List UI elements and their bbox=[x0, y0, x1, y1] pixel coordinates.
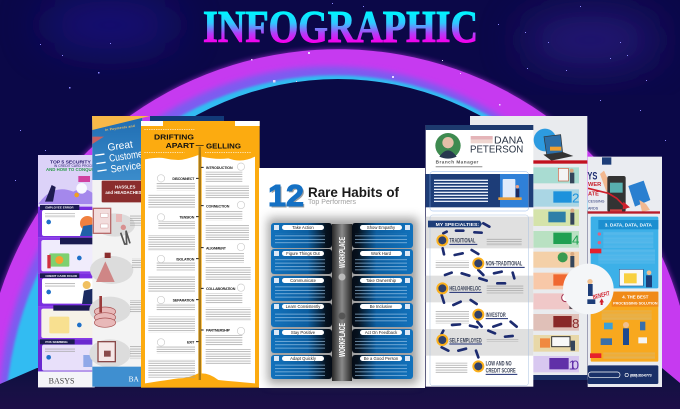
specialty labels: INVESTOR bbox=[486, 312, 506, 319]
benefit circle bbox=[563, 264, 614, 314]
left column: drifting stages: TENSION bbox=[179, 215, 195, 219]
specialty labels: NON-TRADITIONAL bbox=[486, 261, 522, 268]
heading: 12 rare habits: 12 bbox=[270, 180, 306, 214]
specialty labels: LOW AND NO bbox=[486, 361, 512, 368]
left column: drifting stages: ISOLATION bbox=[176, 257, 195, 261]
section: best processing solution: PROCESSING SOLUTION bbox=[613, 302, 658, 306]
panel: payment processing infographic bbox=[563, 157, 662, 387]
title: INFOGRAPHIC bbox=[203, 2, 478, 52]
red divider bbox=[588, 211, 660, 214]
laptop and globe icon bbox=[534, 129, 573, 161]
heading: drifting apart: DRIFTING bbox=[154, 133, 194, 142]
right column: gelling stages: ALIGNMENT bbox=[206, 246, 227, 250]
specialty labels bbox=[449, 238, 525, 374]
job title bbox=[436, 159, 482, 167]
right habit cards bbox=[352, 223, 413, 379]
contact footer: (888) 310-0773 bbox=[630, 373, 652, 378]
panel 1 headline bbox=[46, 159, 111, 172]
section: employee error bbox=[38, 205, 95, 237]
specialty labels: TRADITIONAL bbox=[449, 238, 475, 245]
stripes bbox=[426, 172, 533, 386]
left column: drifting stages: SEPARATION bbox=[173, 298, 195, 302]
dark footer strip bbox=[523, 375, 587, 380]
footer logo: BASYS bbox=[49, 376, 74, 385]
heading fragments: WER bbox=[588, 182, 601, 188]
panel 1 headline: AND HOW TO CONQUER THEM bbox=[46, 167, 111, 172]
card: stay positive: Stay Positive bbox=[291, 330, 316, 335]
footer logo bbox=[38, 372, 95, 387]
hassles and headaches banner: and HEADACHES bbox=[105, 190, 142, 195]
section: data, data, data: 3. DATA, DATA, DATA bbox=[605, 223, 653, 228]
card: work hard: Work Hard bbox=[371, 251, 392, 256]
card terminal illustration bbox=[588, 157, 650, 212]
card: take ownership: Take Ownership bbox=[366, 278, 397, 283]
name: dana peterson bbox=[470, 135, 524, 155]
specialty descriptions bbox=[436, 238, 523, 373]
step rows: 6 bbox=[572, 274, 579, 289]
centre column: workplace bbox=[332, 224, 352, 381]
name: dana peterson: PETERSON bbox=[470, 144, 523, 155]
heading fragments bbox=[587, 170, 605, 210]
section: supplier risk bbox=[38, 237, 95, 273]
centre column: workplace: WORKPLACE bbox=[338, 323, 347, 357]
heading: drifting apart bbox=[154, 133, 241, 151]
great customer service heading: Service bbox=[110, 160, 142, 176]
red divider bbox=[523, 160, 587, 164]
card: take action: Take Action bbox=[292, 225, 314, 230]
dashed route bbox=[442, 223, 517, 357]
section: pos skimming bbox=[38, 339, 95, 371]
profile photo bbox=[435, 133, 461, 159]
panel: great customer service infographic bbox=[89, 116, 224, 387]
card: be a good person bbox=[352, 355, 413, 379]
heading fragments: ATE bbox=[588, 191, 599, 197]
card: work hard bbox=[352, 249, 413, 274]
intro band bbox=[426, 174, 533, 207]
card: be a good person: Be a Good Person bbox=[364, 356, 399, 361]
panel: security risks infographic bbox=[38, 155, 111, 387]
left column: drifting stages: DISCONNECT bbox=[172, 177, 195, 181]
benefit circle: BENEFIT bbox=[592, 290, 611, 301]
great customer service heading bbox=[92, 123, 148, 177]
heading fragments: YS bbox=[587, 170, 598, 182]
card: learn consistently: Learn Consistently bbox=[286, 304, 321, 309]
card: adapt quickly bbox=[271, 355, 332, 379]
side text blocks bbox=[130, 215, 142, 358]
my specialties banner bbox=[428, 221, 482, 228]
heading fragments: ARDS bbox=[588, 206, 599, 210]
step rows: 10 bbox=[569, 357, 579, 372]
specialty icons bbox=[437, 235, 483, 371]
right column: gelling stages bbox=[201, 163, 251, 364]
heading fragments: CESSING bbox=[588, 200, 605, 204]
great customer service heading: In Payments and bbox=[105, 124, 135, 132]
heading: 12 rare habits: 12 bbox=[268, 178, 304, 213]
job title: Branch Manager bbox=[436, 159, 479, 164]
specialty labels: CREDIT SCORE bbox=[486, 367, 516, 374]
centre column: workplace: WORKPLACE bbox=[338, 237, 347, 268]
panel: twelve rare habits bbox=[259, 168, 425, 388]
card block shadow bbox=[268, 218, 418, 384]
panel: dana peterson specialties bbox=[426, 125, 533, 387]
card: be inclusive: Be Inclusive bbox=[370, 304, 393, 309]
left column: drifting stages: EXIT bbox=[187, 340, 195, 344]
my specialties banner: MY SPECIALTIES: bbox=[436, 222, 479, 228]
great customer service heading: Great bbox=[107, 139, 134, 154]
ground strip bbox=[0, 368, 680, 409]
right column: gelling stages: PARTNERSHIP bbox=[206, 329, 231, 333]
section: best processing solution bbox=[590, 292, 658, 362]
panel behind: light process infographic bbox=[470, 116, 587, 380]
panel 1 headline: IN CREDIT CARD PROCESSING bbox=[54, 164, 104, 168]
heading: drifting apart: GELLING bbox=[206, 142, 241, 151]
heading: 12 rare habits: Top Performers bbox=[308, 197, 356, 206]
card: communicate: Communicate bbox=[290, 278, 317, 283]
hassles and headaches banner bbox=[102, 181, 143, 202]
section: employee error: EMPLOYEE ERROR bbox=[45, 206, 74, 210]
section: data, data, data bbox=[590, 217, 658, 288]
heading: 12 rare habits bbox=[268, 178, 399, 214]
card: act on feedback bbox=[352, 329, 413, 353]
step rows: 2 bbox=[572, 191, 579, 206]
blue footer with logo: BA bbox=[129, 375, 140, 384]
card: stay positive bbox=[271, 329, 332, 353]
section: credit card fraud bbox=[38, 273, 95, 307]
hero illustration bbox=[39, 176, 95, 204]
left column: drifting stages bbox=[148, 175, 199, 378]
card: take ownership bbox=[352, 276, 413, 301]
section: credit card fraud: CREDIT CARD FRAUD bbox=[45, 274, 78, 278]
right column: gelling stages: CONNECTION bbox=[206, 204, 230, 208]
card: take action bbox=[271, 223, 332, 248]
step rows bbox=[530, 167, 580, 372]
contact footer bbox=[588, 365, 658, 384]
brown illustrations bbox=[89, 208, 135, 367]
right column: gelling stages: COLLABORATION bbox=[206, 287, 236, 291]
card: adapt quickly: Adapt Quickly bbox=[290, 356, 317, 361]
card: communicate bbox=[271, 276, 332, 301]
card: be inclusive bbox=[352, 303, 413, 327]
step rows: 4 bbox=[572, 233, 580, 248]
panel 1 headline: TOP 5 SECURITY RISKS bbox=[50, 159, 108, 165]
step rows: 8 bbox=[572, 316, 579, 331]
section: pos skimming: POS SKIMMING bbox=[45, 340, 68, 344]
name: dana peterson: DANA bbox=[494, 135, 524, 146]
section: outdated systems bbox=[38, 305, 95, 339]
card: figure things out: Figure Things Out bbox=[286, 251, 321, 256]
panel: drifting apart vs gelling bbox=[141, 121, 260, 388]
heading: 12 rare habits: Rare Habits of bbox=[308, 184, 399, 200]
specialty labels: SELF EMPLOYED bbox=[449, 337, 482, 344]
card: show empathy: Show Empathy bbox=[367, 225, 396, 230]
great customer service heading: Customer bbox=[108, 149, 147, 165]
left habit cards bbox=[271, 223, 332, 379]
hassles and headaches banner: HASSLES bbox=[115, 185, 136, 190]
card: learn consistently bbox=[271, 303, 332, 327]
heading: drifting apart: APART bbox=[166, 141, 195, 150]
card: figure things out bbox=[271, 249, 332, 274]
card: show empathy bbox=[352, 223, 413, 248]
specialty labels: HELOAN/HELOC bbox=[449, 286, 481, 293]
right column: gelling stages: INTRODUCTION bbox=[206, 166, 233, 170]
blue footer with logo bbox=[92, 367, 142, 387]
card: act on feedback: Act On Feedback bbox=[365, 330, 398, 335]
columns bbox=[145, 147, 255, 383]
section: best processing solution: 4. THE BEST bbox=[622, 294, 649, 299]
